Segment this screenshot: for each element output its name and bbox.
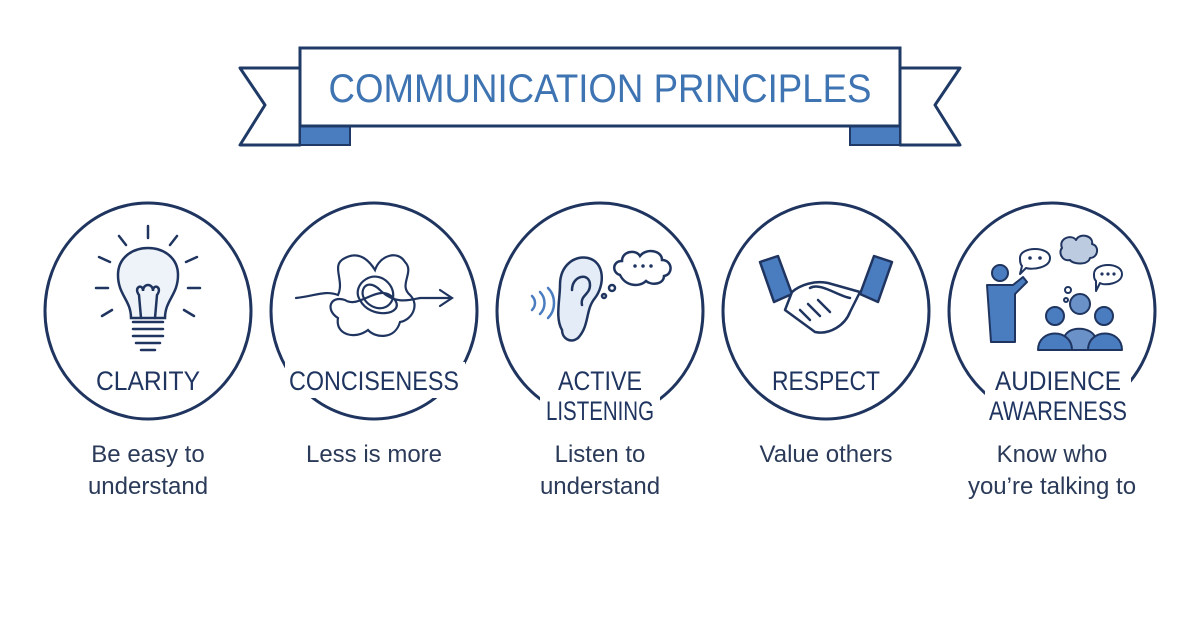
text: audience awareness description — [968, 441, 1136, 500]
icon: presenter and audience — [987, 236, 1122, 350]
text: clarity description: Be easy to — [91, 441, 205, 468]
panel: clarity — [45, 203, 251, 419]
panel: audience awareness — [949, 203, 1155, 428]
panel: active listening — [497, 203, 703, 428]
text: audience awareness description: Know who — [997, 441, 1107, 468]
label: AUDIENCE — [995, 366, 1121, 396]
text: active listening description: understand — [540, 473, 660, 500]
icon: tangle arrow — [296, 255, 452, 336]
panel: audience awareness: AWARENESS — [989, 396, 1127, 426]
title: COMMUNICATION PRINCIPLES — [328, 67, 872, 111]
icon: light bulb — [96, 226, 200, 350]
text: active listening description: Listen to — [555, 441, 645, 468]
panel: active listening: LISTENING — [546, 396, 654, 426]
panel: respect — [723, 203, 929, 419]
icon: handshake — [760, 256, 892, 333]
label: CLARITY — [96, 366, 200, 396]
title banner — [240, 48, 960, 145]
text: active listening description — [540, 441, 660, 500]
text: clarity description: understand — [88, 473, 208, 500]
text: clarity description — [88, 441, 208, 500]
text: audience awareness description: you’re talking to — [968, 473, 1136, 500]
text: conciseness description: Less is more — [306, 441, 442, 468]
label: ACTIVE — [558, 366, 642, 396]
panel: conciseness — [271, 203, 477, 419]
icon: ear with sound and thought — [532, 251, 671, 340]
label: RESPECT — [772, 366, 880, 396]
label: CONCISENESS — [289, 366, 459, 396]
text: respect description: Value others — [760, 441, 892, 468]
